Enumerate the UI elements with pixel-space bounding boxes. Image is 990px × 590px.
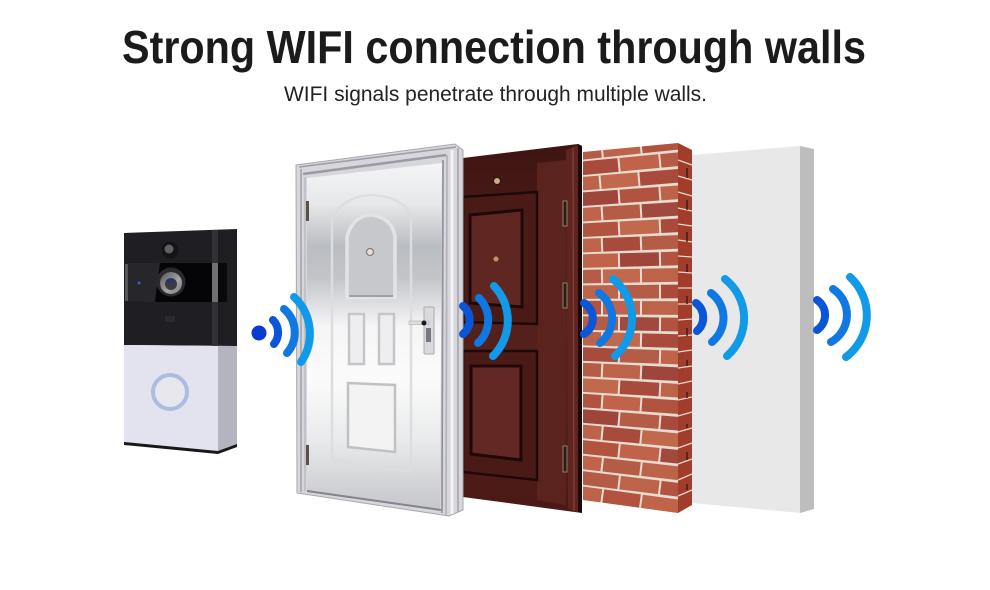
- subtitle: WIFI signals penetrate through multiple walls.: [284, 83, 707, 106]
- middle panels: [349, 314, 364, 364]
- black top: [124, 229, 237, 346]
- wifi signal 4: [696, 279, 744, 356]
- wifi signal 2: [463, 286, 508, 356]
- LED: [138, 282, 140, 284]
- window: [126, 263, 227, 302]
- doorbell: [124, 229, 237, 454]
- PIR sensor: [162, 242, 178, 258]
- silver door: [296, 144, 463, 516]
- dark wooden door: [463, 144, 582, 513]
- handle and lock: [409, 307, 434, 354]
- plain white wall: [692, 146, 814, 513]
- peephole and lock: [494, 178, 500, 184]
- brick wall: [575, 135, 692, 514]
- lower panel: [348, 383, 395, 452]
- wifi signal 5: [817, 277, 867, 357]
- title: Strong WIFI connection through walls: [122, 21, 866, 73]
- lower panel: [463, 351, 537, 480]
- button ring: [153, 375, 187, 409]
- camera lens: [156, 268, 186, 296]
- arched upper panel: [347, 215, 395, 298]
- hinges: [563, 201, 567, 226]
- upper panel: [463, 192, 537, 324]
- wifi signal 1: [252, 297, 310, 362]
- hinges: [306, 201, 309, 221]
- wifi signal 3: [584, 279, 632, 356]
- door panel outline: [332, 195, 411, 472]
- speaker slot: [165, 316, 175, 322]
- silver base: [124, 345, 218, 452]
